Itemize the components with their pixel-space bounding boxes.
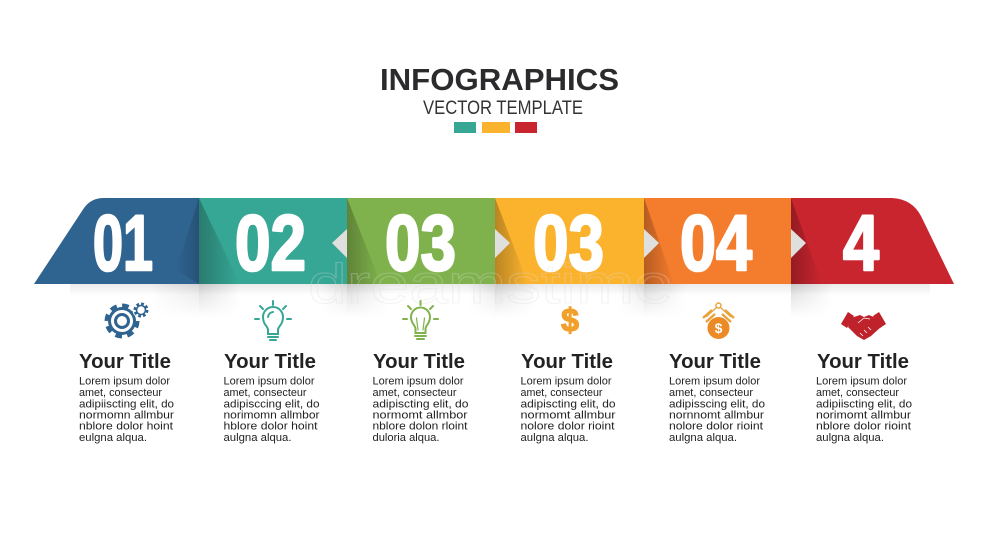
arrow teal to green	[332, 229, 347, 258]
drop shadows under ribbon	[70, 284, 930, 310]
column 1 text: amet, consecteur	[79, 387, 162, 399]
arrow green to yellow	[495, 229, 510, 258]
icon: hanging coin	[703, 303, 734, 339]
column 4 text: adipiscting elit, do	[520, 398, 616, 410]
panel 03 green	[347, 198, 495, 284]
column 4 text: amet, consecteur	[520, 387, 603, 399]
ribbon numbers: 03	[533, 198, 604, 287]
icon: green light bulb	[403, 301, 438, 339]
icon: teal light bulb	[255, 301, 291, 340]
infographic canvas	[34, 68, 954, 444]
column 5 text	[669, 351, 765, 444]
column 2 text: Your Title	[224, 351, 316, 373]
watermark: dreamstime	[308, 252, 673, 315]
column 2 text: hblore dolor hoint	[224, 420, 318, 432]
column 3 text: Lorem ipsum dolor	[372, 376, 464, 388]
column 5 text: amet, consecteur	[669, 387, 753, 399]
column 1 text: adipiiscting elit, do	[79, 398, 174, 410]
column 1 text: eulgna alqua.	[79, 432, 147, 444]
column 1 text	[79, 351, 174, 444]
column 5 text: Lorem ipsum dolor	[669, 376, 760, 388]
column 6 text: amet, consecteur	[816, 387, 899, 399]
column 4 text	[520, 351, 616, 444]
column 6 text: aulgna alqua.	[816, 432, 884, 444]
column 5 text: nolore dolor rioint	[669, 420, 764, 432]
ribbon numbers: 4	[843, 198, 879, 287]
column 2 text: amet, consecteur	[224, 387, 307, 399]
column 2 text: norimomn allmbor	[224, 410, 320, 422]
ribbon numbers	[93, 198, 879, 287]
column 5 text: nornnomt allmbur	[669, 410, 764, 422]
icon: handshake	[841, 312, 886, 340]
column 1 text: normomn allmbur	[79, 410, 174, 422]
column 3 text: nblore dolon rloint	[372, 420, 468, 432]
title: INFOGRAPHICS	[380, 62, 619, 97]
column 6 text: norimomt allmbur	[816, 410, 911, 422]
column 2 text: adipisccing elit, do	[224, 398, 320, 410]
column 2 text: Lorem ipsum dolor	[224, 376, 315, 388]
colour swatches	[454, 122, 537, 133]
column 2 text: aulgna alqua.	[224, 432, 292, 444]
column 6 text: Lorem ipsum dolor	[816, 376, 907, 388]
column 3 text: amet, consecteur	[372, 387, 457, 399]
column 5 text: Your Title	[669, 351, 761, 373]
icon: gears	[107, 302, 150, 336]
column 1 text: nblore dolor hoint	[79, 420, 174, 432]
column 5 text: adipisscing elit, do	[669, 398, 765, 410]
column 3 text: adipiscting elit, do	[372, 398, 468, 410]
column 4 text: aulgna alqua.	[520, 432, 588, 444]
ribbon numbers: 04	[680, 198, 752, 287]
title: VECTOR TEMPLATE	[423, 97, 583, 119]
column 3 text: normomt allmbor	[372, 410, 468, 422]
panel 04 orange	[644, 198, 791, 284]
ribbon numbers: 01	[93, 198, 153, 287]
ribbon numbers: 03	[385, 198, 456, 287]
connector arrows	[332, 229, 806, 258]
column 3 text: Your Title	[373, 351, 465, 373]
panel 4 red	[791, 198, 954, 284]
column 2 text	[224, 351, 320, 444]
column 6 text: Your Title	[817, 351, 909, 373]
column 6 text: adipiiscting elit, do	[816, 398, 912, 410]
ribbon numbers: 02	[235, 198, 306, 287]
column 1 text: Lorem ipsum dolor	[79, 376, 170, 388]
column 4 text: Your Title	[521, 351, 613, 373]
icon: hanging coin: $	[715, 320, 723, 336]
column 4 text: nolore dolor rioint	[520, 420, 615, 432]
ribbon fold shading	[176, 198, 822, 284]
panel 03 yellow	[495, 198, 644, 284]
column 4 text: Lorem ipsum dolor	[520, 376, 612, 388]
arrow orange to red	[791, 229, 806, 258]
panel 01 blue	[34, 198, 199, 284]
title	[380, 62, 619, 119]
column 3 text	[372, 351, 468, 444]
column 4 text: normomt allmbur	[520, 410, 616, 422]
column 6 text	[816, 351, 912, 444]
panel 02 teal	[199, 198, 348, 284]
arrow yellow to orange	[644, 229, 659, 258]
column 6 text: nblore dolor rioint	[816, 420, 912, 432]
ribbon panels	[34, 198, 954, 284]
column 5 text: aulgna alqua.	[669, 432, 737, 444]
icon: dollar sign: $	[561, 302, 579, 338]
column 1 text: Your Title	[79, 351, 171, 373]
column 3 text: duloria alqua.	[372, 432, 440, 444]
